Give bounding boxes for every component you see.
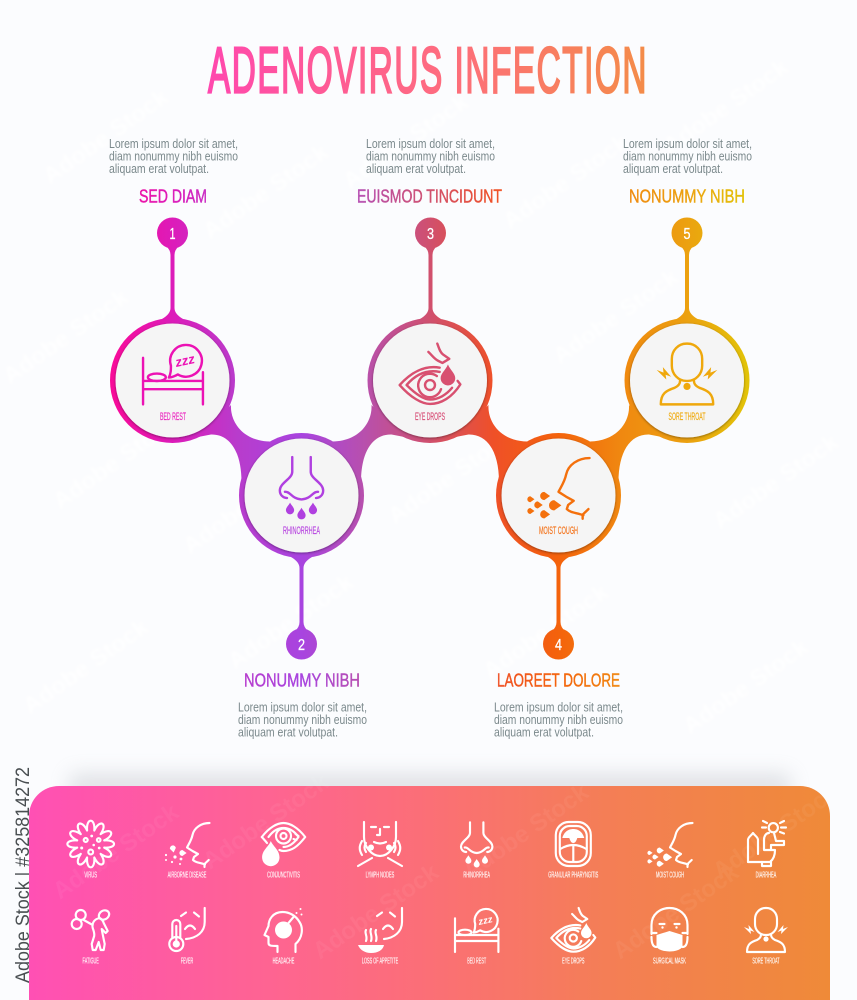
text block 2: Lorem ipsum dolor sit amet, <box>238 700 367 714</box>
step 2 node: RHINORRHEA <box>283 525 320 537</box>
text block 4: LAOREET DOLORE <box>497 670 620 690</box>
watermarks <box>0 53 844 740</box>
icon: virus <box>67 821 114 880</box>
text block 4: Lorem ipsum dolor sit amet, <box>494 700 623 714</box>
text block 1: SED DIAM <box>139 186 207 207</box>
icon: granular pharyngitis <box>548 822 598 880</box>
text block 3 <box>357 136 502 207</box>
watermarks: Adobe Stock <box>48 408 184 515</box>
pin 3 <box>415 218 446 248</box>
step 4 node: MOIST COUGH <box>539 525 578 537</box>
icon: diarrhea: DIARRHEA <box>756 870 776 880</box>
connected timeline <box>110 218 750 660</box>
step 5 node <box>624 318 750 443</box>
icon: sore throat: SORE THROAT <box>752 955 780 965</box>
icon: lymph nodes: LYMPH NODES <box>366 870 394 880</box>
text block 2: NONUMMY NIBH <box>244 670 360 690</box>
panel: icon band: GRANULAR PHARYNGITIS <box>548 870 598 880</box>
text block 3: aliquam erat volutpat. <box>366 161 466 176</box>
panel: icon band: Adobe Stock <box>48 798 184 905</box>
icon: airborne disease <box>165 823 210 880</box>
icon: virus: VIRUS <box>84 870 97 880</box>
side credit: Adobe Stock | #325814272 <box>12 767 34 983</box>
text block 5: Lorem ipsum dolor sit amet, <box>623 136 752 151</box>
icon: rhinorrhea <box>461 822 492 880</box>
icon: fever: FEVER <box>181 955 193 965</box>
band shadow <box>70 774 790 800</box>
text block 5: aliquam erat volutpat. <box>623 161 723 176</box>
icon: lymph nodes <box>358 822 402 880</box>
watermarks: Adobe Stock <box>478 578 614 685</box>
text block 4: diam nonummy nibh euismo <box>494 712 623 727</box>
icon: moist cough: MOIST COUGH <box>656 870 684 880</box>
step 5 node: SORE THROAT <box>668 411 706 423</box>
icon: rhinorrhea: RHINORRHEA <box>463 870 490 880</box>
icon: conjunctivitis <box>262 823 305 880</box>
pin 3: 3 <box>427 226 434 243</box>
text block 1: diam nonummy nibh euismo <box>109 148 238 164</box>
pin 5 <box>672 218 702 248</box>
step 4 node <box>496 433 621 558</box>
text block 4 <box>494 670 623 740</box>
panel: icon band: Adobe Stock <box>608 858 744 965</box>
icon: eye drops <box>551 908 595 965</box>
pin 2: 2 <box>298 637 305 654</box>
text block 5: NONUMMY NIBH <box>629 186 745 207</box>
panel: icon band <box>29 768 844 1000</box>
stems <box>162 246 698 631</box>
watermarks: Adobe Stock <box>38 83 174 190</box>
pin 1 <box>157 218 188 248</box>
text block 3: diam nonummy nibh euismo <box>366 148 495 164</box>
step 3 node <box>368 318 492 443</box>
panel: icon band: Adobe Stock <box>198 768 334 875</box>
watermarks: Adobe Stock <box>0 283 134 390</box>
text block 5: diam nonummy nibh euismo <box>623 148 752 164</box>
connector shapes <box>198 405 662 482</box>
watermarks: Adobe Stock <box>178 453 314 560</box>
step 3 node: EYE DROPS <box>415 411 445 423</box>
step 1 node: BED REST <box>160 411 186 423</box>
watermarks: Adobe Stock <box>498 128 634 235</box>
icon: conjunctivitis: CONJUNCTIVITIS <box>267 870 300 880</box>
step 1 node <box>110 318 235 443</box>
icon: loss of appetite <box>358 908 402 965</box>
icon: fatigue: FATIGUE <box>83 955 99 965</box>
icon: sore throat <box>744 908 788 965</box>
watermarks: Adobe Stock <box>658 53 794 160</box>
watermarks: Adobe Stock <box>223 568 359 675</box>
icon: diarrhea <box>748 821 786 880</box>
panel: icon band: Adobe Stock <box>308 858 444 965</box>
watermarks: Adobe Stock <box>708 428 844 535</box>
text block 2: diam nonummy nibh euismo <box>238 712 367 727</box>
icon: bed rest: BED REST <box>467 955 487 965</box>
icon: moist cough <box>647 823 692 880</box>
text block 3: Lorem ipsum dolor sit amet, <box>366 136 495 151</box>
text block 5 <box>623 136 752 207</box>
panel: icon band: Adobe Stock <box>708 778 844 885</box>
panel: icon band: LOSS OF APPETITE <box>362 955 398 965</box>
watermarks: Adobe Stock <box>678 633 814 740</box>
pin 4 <box>543 628 574 660</box>
text block 4: aliquam erat volutpat. <box>494 724 594 740</box>
watermarks: Adobe Stock <box>18 613 154 720</box>
pin 4: 4 <box>555 637 562 654</box>
pin 5: 5 <box>684 226 691 243</box>
pin 2 <box>286 628 317 660</box>
text block 1: aliquam erat volutpat. <box>109 161 209 176</box>
icon: fatigue <box>72 908 111 965</box>
panel: icon band: SURGICAL MASK <box>653 955 686 965</box>
pin 1: 1 <box>170 226 176 243</box>
icon: eye drops: EYE DROPS <box>562 955 585 965</box>
icon: headache <box>264 908 302 965</box>
watermarks: Adobe Stock <box>548 263 684 370</box>
icon: surgical mask <box>652 908 688 965</box>
text block 3: EUISMOD TINCIDUNT <box>357 186 502 207</box>
panel: icon band: AIRBORNE DISEASE <box>168 870 206 880</box>
text block 2 <box>238 670 367 740</box>
panel: icon band: Adobe Stock <box>458 778 594 885</box>
text block 1 <box>109 136 238 207</box>
step 2 node <box>239 433 364 558</box>
icon: fever <box>169 908 205 965</box>
icon: headache: HEADACHE <box>273 955 294 965</box>
icon: bed rest <box>455 909 498 965</box>
watermarks: Adobe Stock <box>198 138 334 245</box>
watermarks: Adobe Stock <box>338 88 474 195</box>
text block 1: Lorem ipsum dolor sit amet, <box>109 136 238 151</box>
watermarks: Adobe Stock <box>383 423 519 530</box>
text block 2: aliquam erat volutpat. <box>238 724 338 740</box>
